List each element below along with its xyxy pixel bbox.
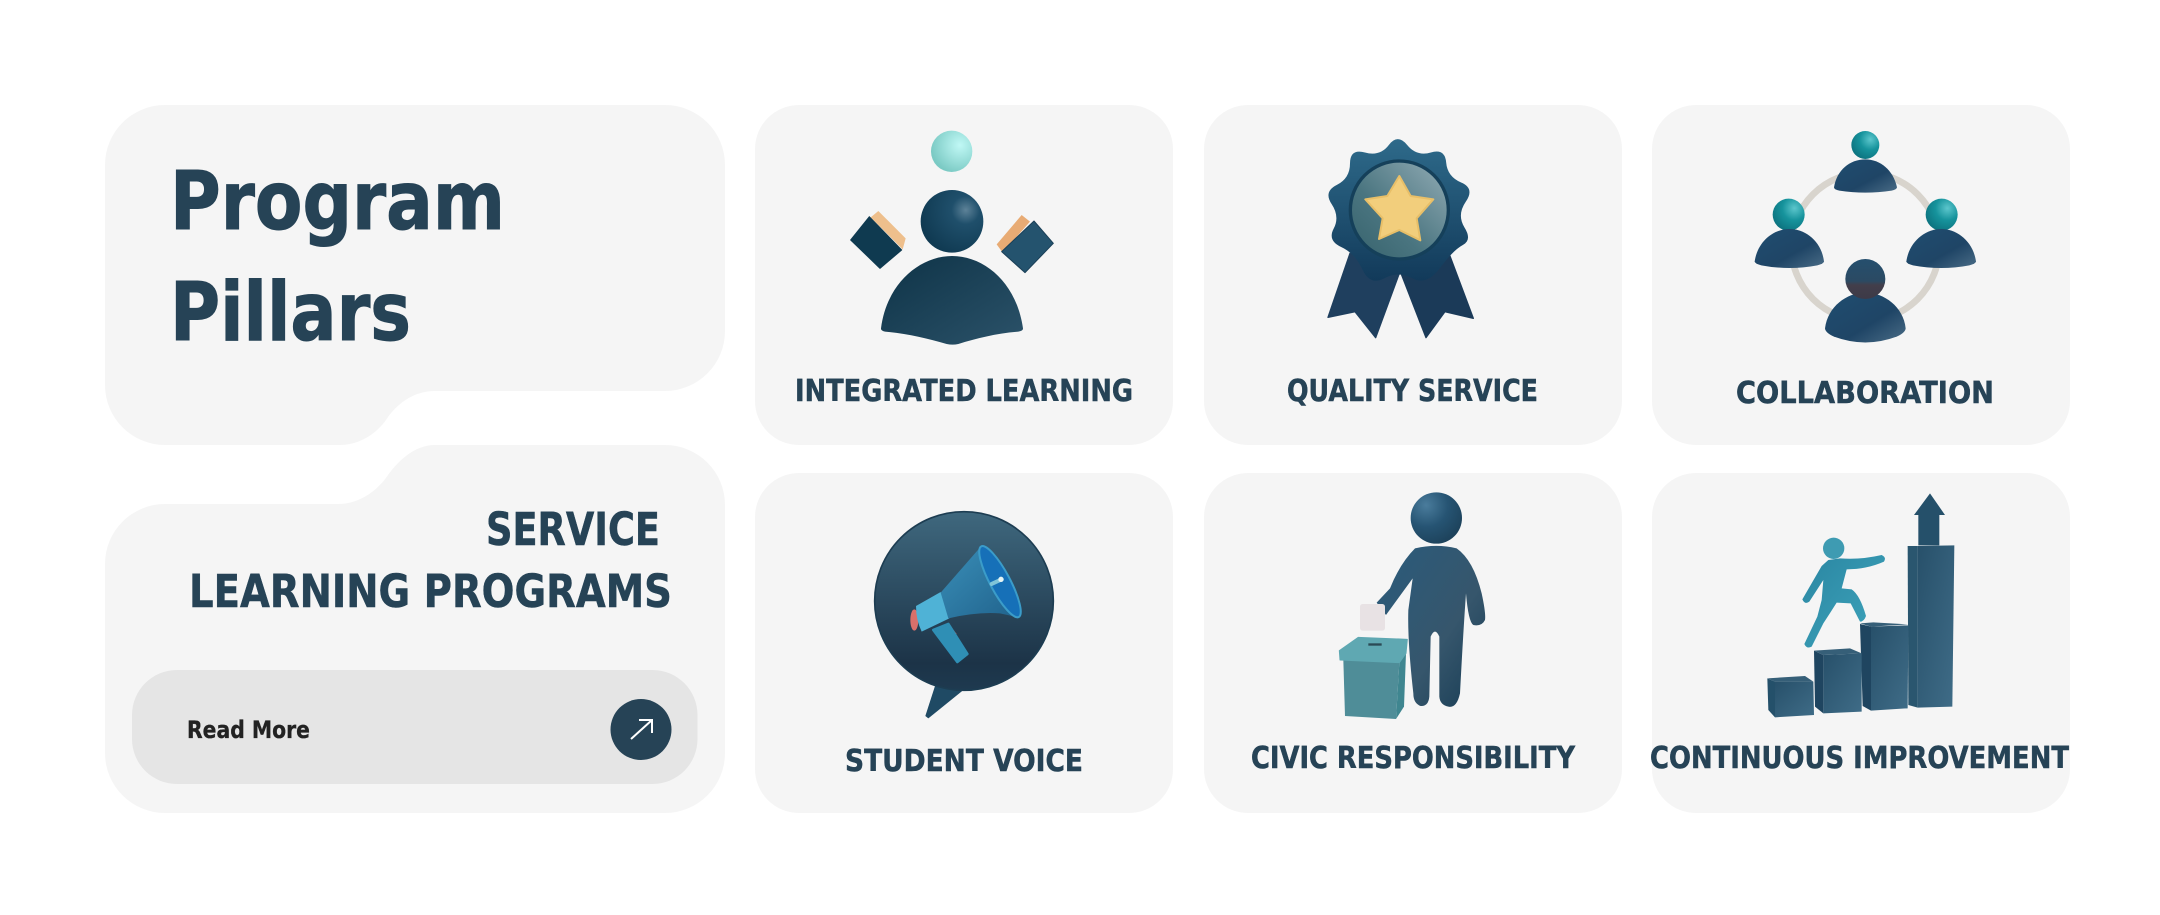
icon: learner with books: [851, 131, 1053, 345]
card: integrated learning: [755, 105, 1173, 445]
card: student voice: [755, 473, 1173, 813]
icon: four people in a ring: [1755, 131, 1976, 342]
label: STUDENT VOICE: [845, 744, 1083, 779]
icon: figure climbing bars with arrow: [1767, 493, 1954, 717]
heading: Program Pillars: Program: [170, 155, 505, 249]
panel: service learning programs: [105, 445, 725, 813]
panel: title: [105, 105, 725, 445]
heading: Program Pillars: Pillars: [170, 266, 411, 360]
button: read more: Read More: [187, 716, 310, 744]
label: INTEGRATED LEARNING: [795, 374, 1133, 409]
subheading: service learning programs: SERVICE: [486, 503, 660, 556]
card: quality service: [1204, 105, 1622, 445]
icon: arrow in circle: [610, 699, 672, 760]
card: collaboration: [1652, 105, 2070, 445]
label: QUALITY SERVICE: [1287, 374, 1538, 409]
label: CONTINUOUS IMPROVEMENT: [1650, 741, 2069, 776]
label: COLLABORATION: [1736, 376, 1994, 411]
subheading: service learning programs: LEARNING PROGRAMS: [189, 565, 672, 618]
heading: Program Pillars: [170, 155, 505, 360]
icon: megaphone speech bubble: [875, 512, 1053, 718]
card: civic responsibility: [1204, 473, 1622, 813]
label: CIVIC RESPONSIBILITY: [1251, 741, 1576, 776]
icon: rosette with star: [1328, 139, 1473, 338]
button: read more: [132, 670, 698, 784]
card: continuous improvement: [1650, 473, 2070, 813]
icon: person voting at ballot box: [1339, 492, 1485, 719]
subheading: service learning programs: [189, 503, 672, 618]
